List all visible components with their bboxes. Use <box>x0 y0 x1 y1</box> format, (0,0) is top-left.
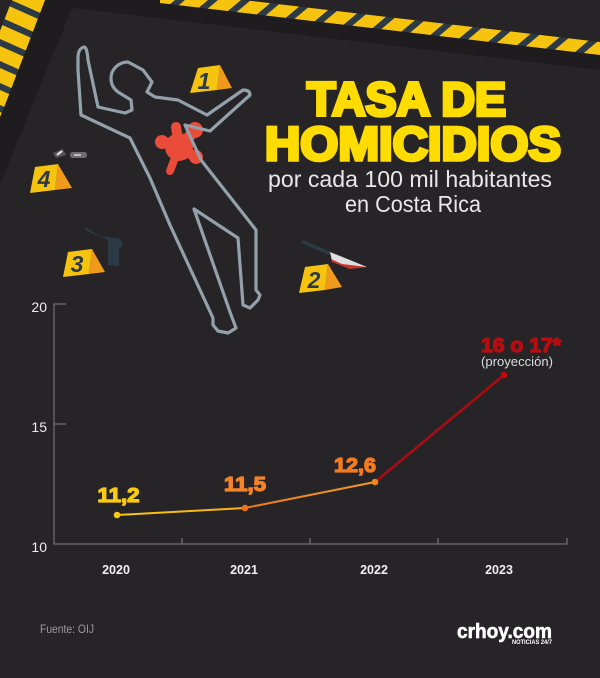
data points <box>114 372 507 518</box>
projection note: (proyección) <box>481 354 553 369</box>
value labels: 16 o 17* <box>481 335 561 357</box>
value labels: 11,5 <box>224 474 266 496</box>
police tape: left <box>0 0 45 117</box>
evidence marker 2: 2 <box>307 267 321 293</box>
subtitle: por cada 100 mil habitantes <box>268 166 552 192</box>
value labels: 11,2 <box>98 485 140 507</box>
chart axes <box>54 304 567 544</box>
y axis labels: 20 <box>31 299 47 315</box>
x axis labels <box>102 563 513 577</box>
icon: knife <box>303 242 367 269</box>
y axis labels <box>31 299 47 555</box>
evidence marker 4: 4 <box>37 166 51 192</box>
x axis labels: 2022 <box>360 563 388 577</box>
title <box>265 72 561 170</box>
subtitle <box>268 166 552 217</box>
value labels: 12,6 <box>334 455 376 477</box>
x axis labels: 2020 <box>102 563 130 577</box>
evidence marker 3 <box>63 249 105 277</box>
subtitle: en Costa Rica <box>345 191 481 217</box>
logo: NOTICIAS 24/7 <box>512 640 553 646</box>
data line <box>117 375 504 515</box>
dark shadow band behind tapes <box>0 0 600 185</box>
x axis labels: 2021 <box>230 563 258 577</box>
value labels <box>98 335 561 507</box>
evidence marker 1: 1 <box>198 68 210 94</box>
police tape: top <box>160 0 600 55</box>
icon: gun <box>85 227 123 266</box>
x axis labels: 2023 <box>485 563 513 577</box>
icon: glasses <box>53 149 87 158</box>
y axis labels: 15 <box>31 419 47 435</box>
chalk body outline <box>78 47 260 333</box>
blood splatter <box>155 122 203 171</box>
y axis labels: 10 <box>31 539 47 555</box>
evidence marker 2 <box>299 264 342 293</box>
title: TASA DE <box>307 72 506 126</box>
evidence marker 1 <box>190 65 232 94</box>
evidence marker 4 <box>30 164 72 193</box>
evidence marker 3: 3 <box>71 251 84 277</box>
title: HOMICIDIOS <box>265 117 561 170</box>
line chart <box>31 299 567 577</box>
source: Fuente: OIJ <box>40 622 94 636</box>
logo: crhoy.com <box>457 621 552 643</box>
